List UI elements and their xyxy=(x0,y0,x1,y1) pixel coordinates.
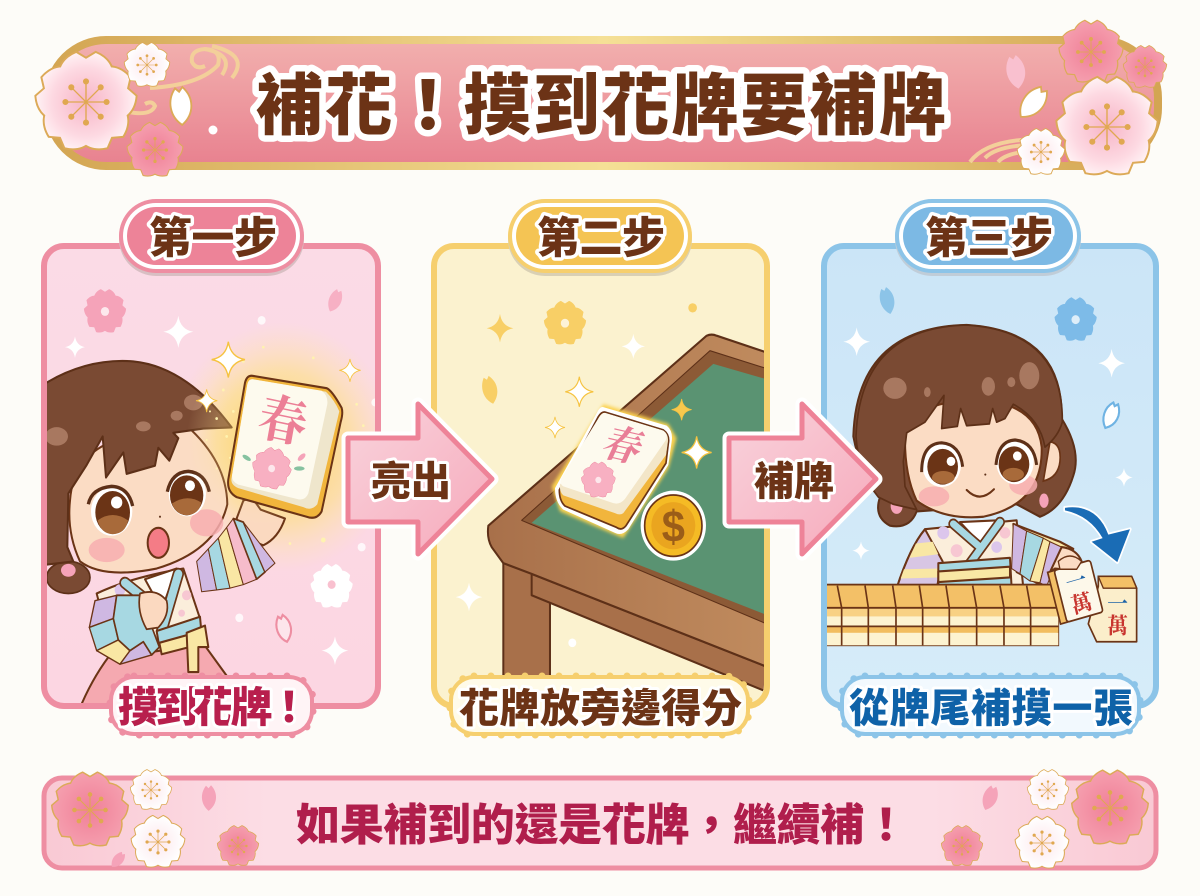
step 3 pill: 第三步 xyxy=(925,215,1053,263)
panel: step 3 xyxy=(823,246,1156,706)
hand fingers xyxy=(1058,556,1082,569)
golden glow xyxy=(194,332,375,562)
tile in hand: 萬 xyxy=(1068,584,1095,621)
icons: background decorations xyxy=(456,301,697,647)
flower tile held up: 春 xyxy=(253,376,314,459)
icons: background decorations xyxy=(65,288,366,665)
character body xyxy=(80,497,285,708)
panel frame xyxy=(44,246,378,706)
raised sleeve stripes xyxy=(197,519,275,592)
icons: background decorations xyxy=(843,285,1133,560)
right sakura cluster xyxy=(1002,21,1168,182)
step 3 pill xyxy=(895,199,1081,276)
arrow: replace tile: 補牌 xyxy=(754,460,834,504)
character eyes xyxy=(88,471,209,536)
gold wave swirls xyxy=(120,46,1060,162)
title banner xyxy=(31,21,1168,182)
gold sparkles xyxy=(196,342,361,412)
caption: step 3 xyxy=(840,675,1141,736)
tile glow xyxy=(552,404,677,538)
gold coin xyxy=(641,491,706,561)
hair ties xyxy=(890,504,902,514)
cheeks, nose and mouth xyxy=(89,509,223,562)
flower tile on table xyxy=(555,407,672,534)
arrow: replace tile xyxy=(729,404,876,554)
step 1 pill: 第一步 xyxy=(149,215,277,263)
bottom note banner xyxy=(44,770,1156,872)
left sleeve and fist xyxy=(89,592,167,664)
note text: 如果補到的還是花牌，繼續補！ xyxy=(296,801,908,850)
panel: step 1 xyxy=(43,246,397,708)
character fringe xyxy=(856,325,1062,510)
caption: step 3: 從牌尾補摸一張 xyxy=(849,687,1133,731)
step 2 pill: 第二步 xyxy=(537,215,665,263)
character head xyxy=(69,426,227,573)
flower tile on table: 春 xyxy=(594,413,655,474)
gold coin: $ xyxy=(662,502,685,552)
caption: step 2: 花牌放旁邊得分 xyxy=(459,686,742,731)
note plate xyxy=(44,778,1156,868)
step 1 pill xyxy=(119,199,304,276)
arrow: reveal xyxy=(348,404,492,554)
banner plate xyxy=(48,40,1158,166)
replacement tile on table: 萬 xyxy=(1107,609,1128,641)
blue curved arrow xyxy=(1065,507,1130,562)
glow over hair and glitter xyxy=(187,346,379,545)
tile in hand xyxy=(1048,560,1103,625)
tile wall xyxy=(823,585,1058,645)
flower tile held up xyxy=(228,376,342,518)
replacement tile on table: 一 xyxy=(1107,587,1128,619)
right sakura group xyxy=(940,770,1151,872)
character hair xyxy=(43,361,232,565)
table xyxy=(488,335,767,697)
cheeks, nose and smile xyxy=(919,474,1037,506)
panel frame xyxy=(434,246,767,706)
scene: table, tile and coin xyxy=(456,301,767,697)
character body xyxy=(897,520,1082,588)
step 2 pill xyxy=(508,199,692,276)
panel: step 2 xyxy=(434,246,767,706)
tile in hand: 一 xyxy=(1062,562,1090,599)
sparkles around tile xyxy=(545,377,712,469)
character eyes xyxy=(922,440,1037,487)
replacement tile on table xyxy=(1088,576,1137,642)
panel frame xyxy=(824,246,1156,706)
caption: step 2 xyxy=(449,675,750,736)
left sakura cluster xyxy=(31,43,218,180)
arrow: reveal: 亮出 xyxy=(371,460,451,504)
caption: step 1: 摸到花牌！ xyxy=(118,684,310,731)
character bun xyxy=(47,561,90,594)
character hair back xyxy=(853,325,1076,526)
scene: character drawing replacement tile xyxy=(823,285,1137,645)
title text: 補花！摸到花牌要補牌 xyxy=(256,69,946,144)
left sakura group xyxy=(49,770,260,871)
scene: character with flower tile xyxy=(43,288,397,708)
character head xyxy=(905,401,1060,517)
